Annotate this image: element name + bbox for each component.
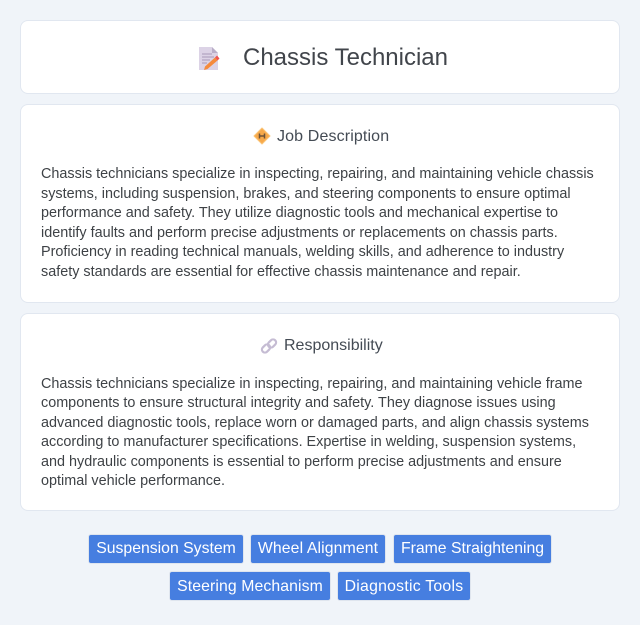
text: job description: Chassis technicians specialize in inspecting, repairing, and maintaining vehicle chassis [41, 166, 594, 182]
tag: wheel alignment [250, 534, 386, 564]
tag: frame straightening [393, 534, 552, 564]
text: responsibility: components to ensure structural integrity and safety. They diagnose issues using [41, 395, 556, 411]
tag: steering mechanism: Steering Mechanism [177, 578, 323, 595]
panel: title card [20, 20, 620, 94]
panel: responsibility [20, 313, 620, 511]
text: responsibility: Chassis technicians specialize in inspecting, repairing, and maintaining vehicle frame [41, 376, 583, 392]
icon: road sign [254, 128, 270, 144]
title: Chassis Technician [243, 44, 448, 71]
tag: suspension system: Suspension System [96, 540, 236, 557]
icon: document with pencil [199, 47, 220, 70]
tag: wheel alignment: Wheel Alignment [258, 540, 378, 557]
tag: diagnostic tools: Diagnostic Tools [345, 578, 463, 595]
tag: suspension system [88, 534, 244, 564]
text: responsibility: according to manufacturer specifications. Expertise in welding, suspension systems, [41, 434, 576, 450]
text: job description: Proficiency in reading technical manuals, welding skills, and adherence to industry [41, 244, 564, 260]
text: job description [41, 166, 594, 280]
text: responsibility [41, 376, 589, 489]
text: job description: safety standards are essential for effective chassis maintenance and repair. [41, 264, 521, 280]
heading: responsibility: Responsibility [284, 337, 383, 354]
text: job description: identify faults and perform precise adjustments or replacements on chassis parts. [41, 225, 558, 241]
text: responsibility: advanced diagnostic tools, replace worn or damaged parts, and align chassis systems [41, 415, 589, 431]
panel: job description [20, 104, 620, 303]
tag: frame straightening: Frame Straightening [401, 540, 544, 557]
text: job description: systems, including suspension, brakes, and steering components to ensure optimal [41, 186, 571, 202]
text: responsibility: and hydraulic components is essential to perform precise adjustments and ensure [41, 454, 562, 470]
text: job description: performance and safety. They utilize diagnostic tools and mechanical expertise to [41, 205, 558, 221]
text: responsibility: optimal vehicle performance. [41, 473, 225, 489]
tag: diagnostic tools [337, 571, 471, 601]
heading: job description: Job Description [277, 128, 389, 145]
tag: steering mechanism [169, 571, 331, 601]
icon: chain link [260, 338, 278, 354]
